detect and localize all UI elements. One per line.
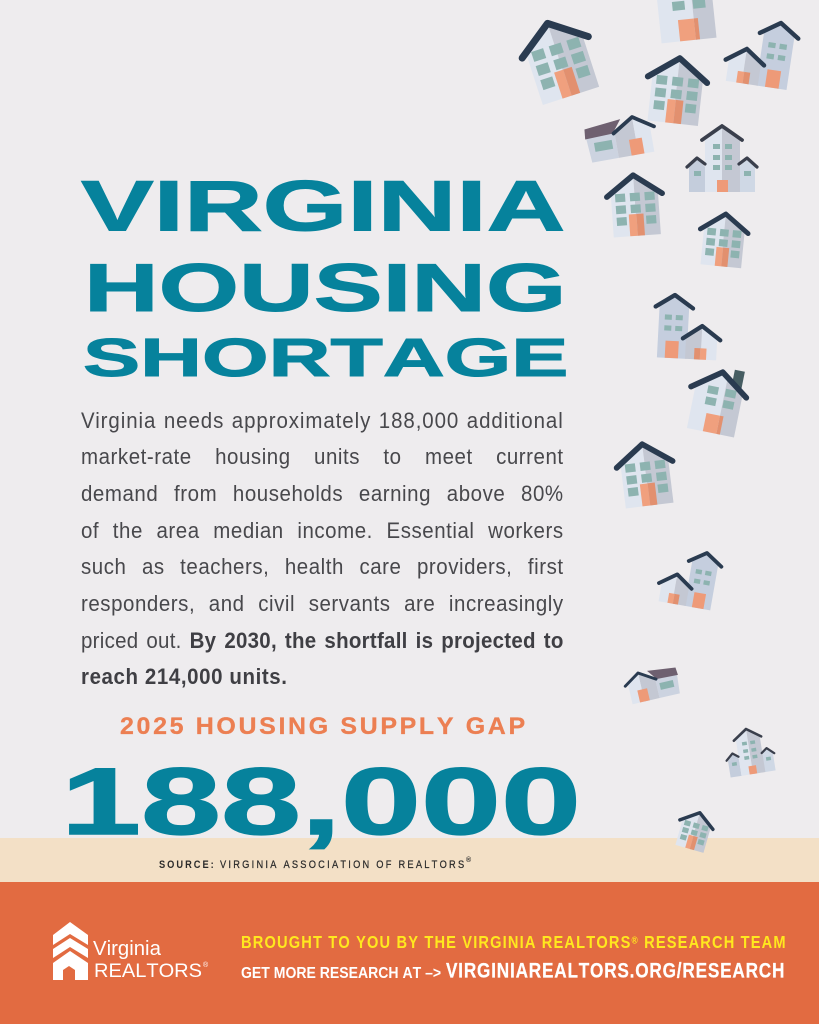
source line: VIRGINIA ASSOCIATION OF REALTORS <box>220 859 466 871</box>
house: small three towers <box>722 725 777 778</box>
body paragraph: reach 214,000 units. <box>81 664 288 689</box>
house: large top left <box>514 13 604 107</box>
falling houses illustration <box>514 0 800 854</box>
house: with chimney <box>683 362 751 438</box>
house: duplex mirrored <box>653 294 723 361</box>
body paragraph: such as teachers, health care providers, first <box>81 554 564 579</box>
footer credit text: GET MORE RESEARCH AT –> <box>241 964 441 982</box>
body paragraph: Virginia needs approximately 188,000 additional <box>81 408 564 432</box>
body paragraph: of the area median income. Essential workers <box>81 518 564 543</box>
title: SHORTAGE <box>82 328 568 388</box>
title: VIRGINIA <box>80 167 565 246</box>
logo wordmark: Virginia <box>93 937 161 959</box>
house: small duplex <box>656 546 723 611</box>
icon: logo stacked chevron house <box>53 922 88 980</box>
supply gap heading: 2025 HOUSING SUPPLY GAP <box>120 712 528 739</box>
sand ground band <box>0 838 819 882</box>
house: long mirrored <box>623 664 682 705</box>
body paragraph <box>81 408 564 689</box>
house: top cropped <box>649 0 721 44</box>
orange footer panel <box>0 882 819 1024</box>
house: centre top <box>643 55 709 126</box>
body paragraph: responders, and civil servants are increasingly <box>81 591 564 616</box>
house: left of towers <box>605 173 665 238</box>
house: mid left <box>614 441 678 509</box>
logo wordmark: ® <box>203 962 208 969</box>
source line: SOURCE: <box>159 859 216 871</box>
body paragraph: demand from households earning above 80% <box>81 481 564 506</box>
source line: ® <box>466 857 471 864</box>
footer credit text: VIRGINIAREALTORS.ORG/RESEARCH <box>446 959 785 982</box>
logo wordmark: REALTORS <box>94 960 202 982</box>
house: long with purple roof <box>583 114 658 163</box>
body paragraph: priced out. By 2030, the shortfall is projected to <box>81 628 564 653</box>
house: duplex top right <box>723 16 800 91</box>
footer credit text: BROUGHT TO YOU BY THE VIRGINIA REALTORS® RESEARCH TEAM <box>241 934 787 953</box>
house: smallest on ground band <box>673 808 716 854</box>
house: below towers <box>697 212 750 269</box>
big number: 188,000 <box>61 748 581 854</box>
house: three towers <box>687 126 757 192</box>
body paragraph: market-rate housing units to meet current <box>81 444 564 469</box>
title: HOUSING <box>84 250 566 326</box>
